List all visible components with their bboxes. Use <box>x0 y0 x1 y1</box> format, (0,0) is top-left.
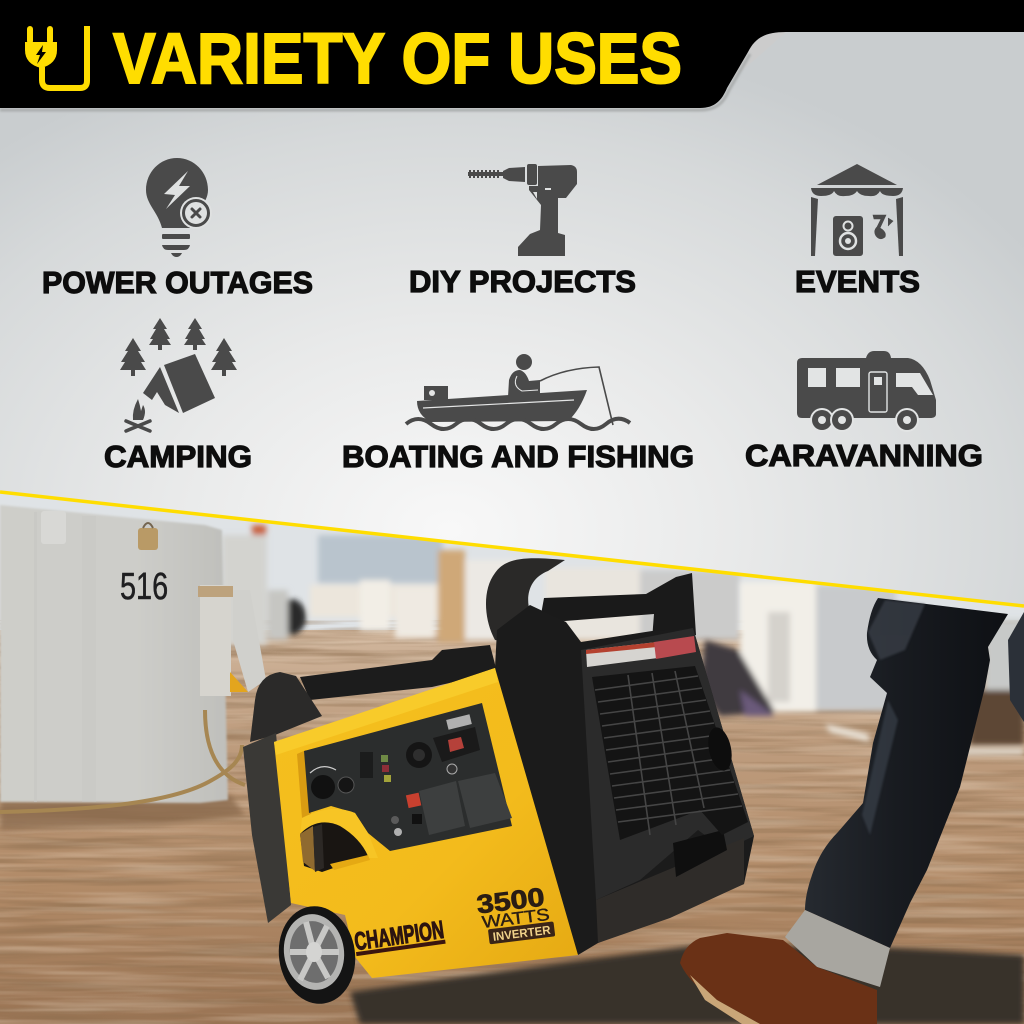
control panel <box>304 703 512 851</box>
left dark side panel <box>243 733 291 923</box>
icon: tent, trees and campfire <box>120 318 237 431</box>
black main body <box>495 605 754 955</box>
use: caravanning <box>745 351 983 473</box>
generator <box>243 558 754 1009</box>
use: diy projects <box>409 164 636 299</box>
title: VARIETY OF USES <box>113 20 682 99</box>
control panel recess <box>297 750 311 818</box>
3500 watts inverter badge <box>476 888 556 944</box>
number: 516: 516 <box>120 565 168 608</box>
yellow diagonal stripe <box>0 492 1024 606</box>
label: power outages: POWER OUTAGES <box>42 265 313 300</box>
red button <box>406 793 421 808</box>
3500 watts inverter badge: INVERTER <box>492 923 552 944</box>
icon: cordless drill <box>468 164 577 256</box>
label: boating and fishing: BOATING AND FISHING <box>342 439 694 474</box>
wheel <box>278 906 356 1004</box>
label: diy projects: DIY PROJECTS <box>409 264 636 299</box>
use: events <box>795 164 920 299</box>
power sockets <box>419 781 465 835</box>
photo background: sky and dock <box>0 480 1024 1024</box>
rear handle <box>250 645 497 742</box>
jeans cuff <box>785 910 890 987</box>
storage box with number 516 <box>0 505 266 812</box>
lower base <box>596 838 744 943</box>
use: camping <box>104 318 252 474</box>
icon: canopy tent with speaker and music <box>811 164 903 256</box>
grey panel background <box>0 32 1024 606</box>
white storage box at right, blurred <box>700 582 1024 755</box>
use: power outages <box>42 158 313 300</box>
carry handle opening <box>300 809 378 872</box>
distant dock boxes, blurred <box>222 525 740 645</box>
leg with jeans <box>680 598 1024 1024</box>
icon: fisherman in boat <box>406 354 630 429</box>
power cable <box>0 710 245 812</box>
label: events: EVENTS <box>795 264 920 299</box>
Champion logo <box>354 920 446 956</box>
icon: plug and cord <box>25 26 87 88</box>
warning labels <box>586 636 696 667</box>
header band <box>0 0 1024 110</box>
label: camping: CAMPING <box>104 439 252 474</box>
3500 watts inverter badge: 3500 <box>475 881 546 919</box>
front handle arc and top bar <box>486 558 696 640</box>
yellow body <box>274 668 578 978</box>
shadow beneath storage box <box>0 795 245 830</box>
icon: motorhome <box>797 351 936 432</box>
knobs and outlets <box>311 775 335 799</box>
photo: generator on a dock <box>0 480 1024 1024</box>
icon: light bulb with x badge <box>146 158 212 257</box>
vent grille <box>592 666 748 840</box>
3500 watts inverter badge: WATTS <box>481 905 551 932</box>
brown shoe <box>680 933 877 1024</box>
shadow on the dock in the foreground <box>350 945 1024 1024</box>
label: caravanning: CARAVANNING <box>745 438 983 473</box>
Champion logo: CHAMPION <box>353 916 446 956</box>
use: boating and fishing <box>342 354 694 474</box>
rear face panel <box>581 628 754 900</box>
